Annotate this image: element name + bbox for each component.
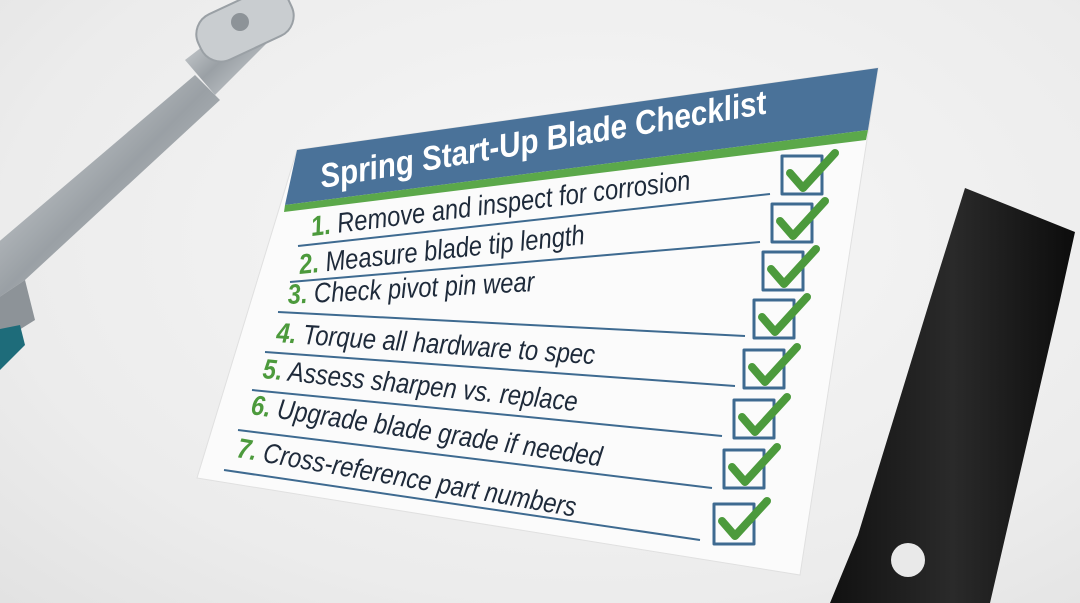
icon: mower blade bbox=[830, 188, 1075, 603]
item 6: 6. Upgrade blade grade if needed bbox=[249, 388, 606, 473]
item 5: 5. Assess sharpen vs. replace bbox=[261, 352, 579, 418]
item 4: 4. Torque all hardware to spec bbox=[275, 316, 596, 371]
item 5 bbox=[252, 352, 722, 436]
item 7 bbox=[224, 432, 700, 540]
panel: checklist card bbox=[197, 68, 878, 575]
item 2: 2. Measure blade tip length bbox=[296, 218, 586, 281]
heading band bbox=[284, 68, 878, 212]
item 6 bbox=[238, 388, 712, 488]
item 3: 3. Check pivot pin wear bbox=[287, 265, 536, 310]
item 2 bbox=[290, 218, 760, 282]
item 4 bbox=[265, 316, 735, 386]
item 1: 1. Remove and inspect for corrosion bbox=[309, 164, 692, 242]
icon: torque wrench bbox=[0, 0, 301, 375]
item 3 bbox=[278, 265, 745, 336]
title: Spring Start-Up Blade Checklist bbox=[317, 83, 770, 195]
checkboxes bbox=[714, 153, 835, 544]
item 7: 7. Cross-reference part numbers bbox=[235, 432, 579, 523]
